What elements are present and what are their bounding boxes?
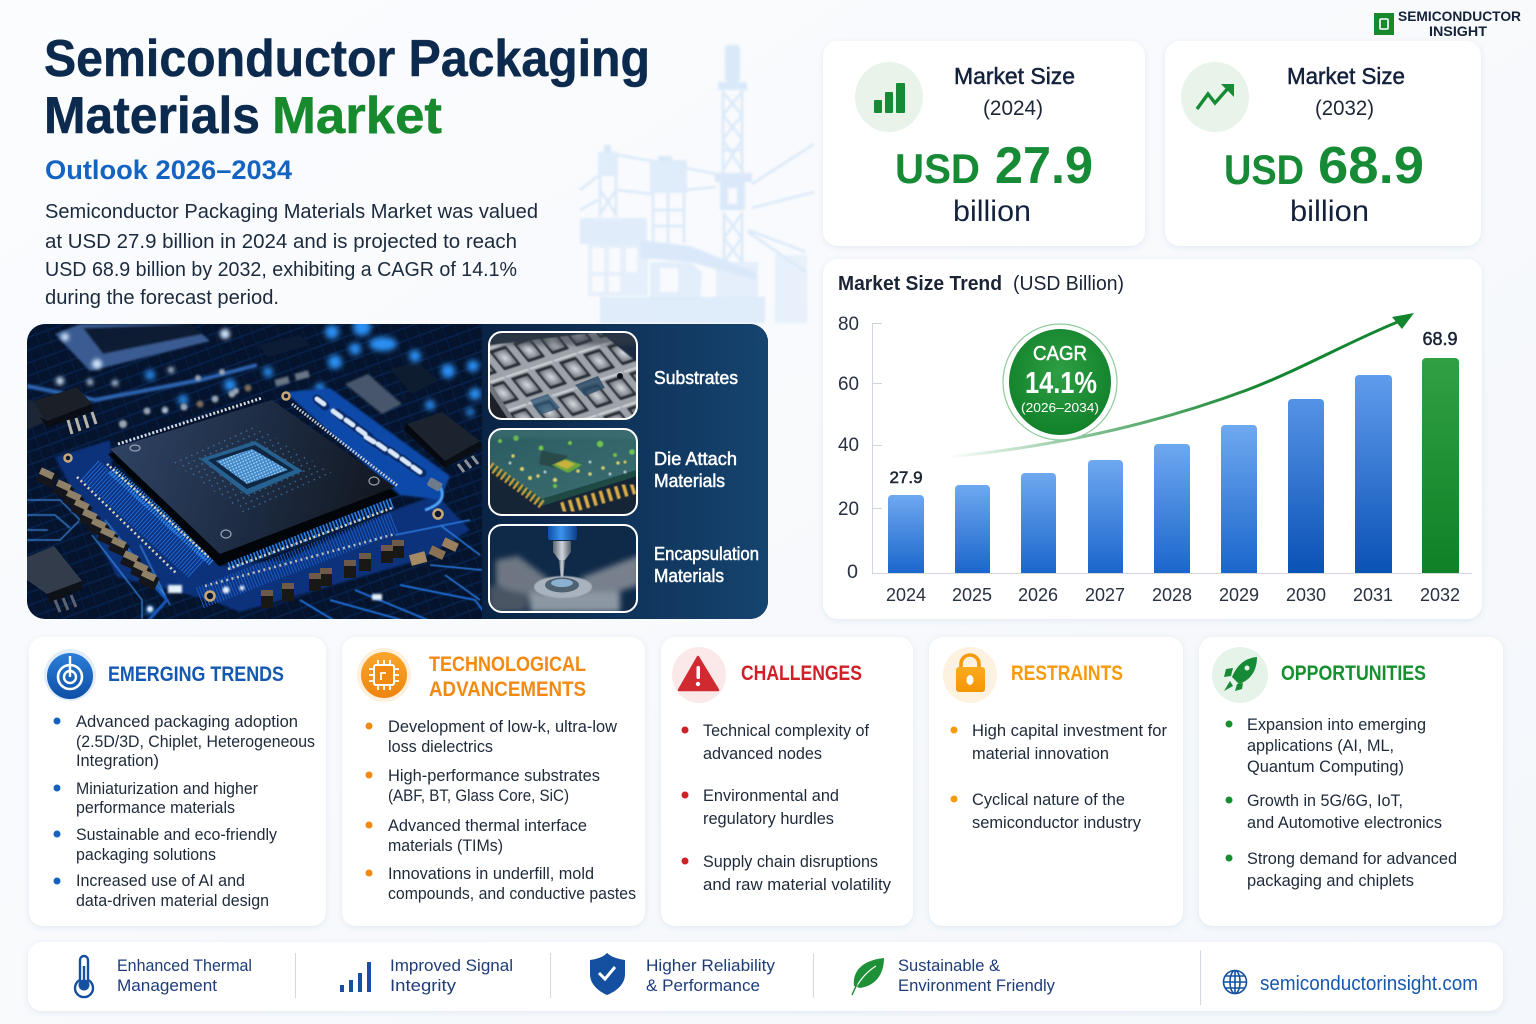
- opportunities bullet list: Growth in 5G/6G, IoT,: [1247, 792, 1403, 810]
- x axis labels: [886, 585, 1460, 605]
- SW fan-out: [77, 464, 213, 574]
- material labels: Die Attach: [654, 449, 737, 469]
- restraints bullet list: Cyclical nature of the: [972, 791, 1125, 809]
- technology bullet list: compounds, and conductive pastes: [388, 885, 636, 903]
- panel: market size 2032: USD: [1224, 146, 1304, 193]
- restraints bullet list: semiconductor industry: [972, 814, 1142, 832]
- chip body: [108, 452, 398, 566]
- technology bullet list: loss dielectrics: [388, 738, 493, 756]
- icon: bar chart: [855, 62, 923, 132]
- thumbnail: die attach materials: [489, 429, 637, 515]
- y axis labels: 60: [838, 374, 859, 395]
- chart title: Market Size Trend: [838, 273, 1002, 295]
- material labels: Materials: [654, 566, 724, 586]
- material labels: Substrates: [654, 368, 738, 388]
- chart title: (USD Billion): [1013, 273, 1124, 295]
- material labels: [654, 368, 759, 586]
- x axis labels: 2029: [1219, 585, 1259, 605]
- trend bullet list: packaging solutions: [76, 846, 216, 864]
- panel: challenges: CHALLENGES: [741, 662, 862, 685]
- challenges bullet list: Technical complexity of: [703, 722, 869, 740]
- bar value labels: [889, 329, 1458, 487]
- trend bullet list: Integration): [76, 752, 159, 770]
- icon: rising trend arrow: [1181, 62, 1249, 132]
- opportunities bullet list: and Automotive electronics: [1247, 814, 1442, 832]
- technology bullet list: [366, 718, 636, 903]
- technology heading: ADVANCEMENTS: [429, 678, 586, 701]
- bar value labels: 68.9: [1422, 329, 1458, 349]
- panel: emerging trends: [29, 637, 326, 926]
- CAGR badge: (2026–2034): [1021, 400, 1099, 415]
- y axis labels: [838, 314, 859, 583]
- logo: Semiconductor Insight: INSIGHT: [1429, 23, 1487, 39]
- blue glows: [145, 318, 481, 614]
- panel: market size 2024: [823, 41, 1145, 246]
- x axis labels: 2024: [886, 585, 926, 605]
- trend bullet list: [54, 713, 315, 910]
- y axis labels: 40: [838, 435, 859, 456]
- title: Market: [272, 87, 442, 145]
- opportunities bullet list: packaging and chiplets: [1247, 872, 1414, 890]
- technology bullet list: High-performance substrates: [388, 767, 600, 785]
- mounting holes: [64, 392, 442, 600]
- SE fan-out: [200, 502, 395, 598]
- y axis labels: 0: [847, 562, 858, 583]
- title: Materials: [44, 87, 260, 145]
- technology bullet list: materials (TIMs): [388, 837, 503, 855]
- icon: leaf: [852, 958, 884, 995]
- technology bullet list: Advanced thermal interface: [388, 817, 587, 835]
- restraints bullet list: [950, 722, 1167, 832]
- logo: Semiconductor Insight: SEMICONDUCTOR: [1398, 8, 1521, 24]
- CAGR badge: [1003, 324, 1117, 440]
- challenges bullet list: regulatory hurdles: [703, 810, 834, 828]
- right navy panel: [482, 324, 768, 619]
- chart title: [838, 273, 1124, 295]
- trend bullet list: Sustainable and eco-friendly: [76, 826, 278, 844]
- icon: globe: [1224, 970, 1246, 994]
- challenges bullet list: [682, 722, 892, 894]
- benefit: thermal management: Enhanced Thermal: [117, 956, 252, 975]
- opportunities bullet list: [1226, 716, 1457, 890]
- axes: [872, 324, 1472, 574]
- restraints bullet list: High capital investment for: [972, 722, 1167, 740]
- background: faint industrial tower illustration: [580, 45, 814, 323]
- restraints bullet list: material innovation: [972, 745, 1109, 763]
- lozenge silver components: [317, 399, 443, 492]
- panel: technological advancements: [342, 637, 645, 926]
- icon: padlock: [943, 647, 997, 703]
- opportunities bullet list: Strong demand for advanced: [1247, 850, 1457, 868]
- panel: restraints: RESTRAINTS: [1011, 662, 1123, 685]
- panel: circuit board photo with material types: [27, 318, 768, 630]
- benefit: reliability: Higher Reliability: [646, 956, 775, 975]
- x axis labels: 2026: [1018, 585, 1058, 605]
- out of focus background components: [27, 324, 438, 430]
- x axis labels: 2027: [1085, 585, 1125, 605]
- technology heading: [429, 653, 586, 701]
- CAGR badge: 14.1%: [1025, 365, 1097, 400]
- intro paragraph: [45, 200, 538, 309]
- brown lower left components: [36, 467, 160, 590]
- bar chart: [888, 358, 1459, 573]
- x axis labels: 2025: [952, 585, 992, 605]
- thumbnail: encapsulation materials: [489, 525, 640, 612]
- trend bullet list: Increased use of AI and: [76, 872, 245, 890]
- challenges bullet list: advanced nodes: [703, 745, 822, 763]
- panel: market size trend chart: [823, 259, 1482, 619]
- technology heading: TECHNOLOGICAL: [429, 653, 586, 676]
- intro paragraph: Semiconductor Packaging Materials Market was valued: [45, 200, 538, 223]
- trend bullet list: performance materials: [76, 799, 235, 817]
- x axis labels: 2028: [1152, 585, 1192, 605]
- panel: emerging trends: EMERGING TRENDS: [108, 663, 284, 686]
- title: Semiconductor Packaging: [44, 30, 650, 88]
- bar value labels: 27.9: [889, 468, 923, 487]
- icon: shield check: [590, 953, 625, 995]
- website: semiconductorinsight.com: [1260, 973, 1478, 995]
- trend bullet list: (2.5D/3D, Chiplet, Heterogeneous: [76, 733, 315, 751]
- ICs near chip: [27, 387, 482, 612]
- panel: restraints: [929, 637, 1183, 926]
- trend bullet list: Advanced packaging adoption: [76, 713, 298, 731]
- material labels: Materials: [654, 471, 725, 491]
- icon: thermometer: [75, 956, 93, 997]
- white glints on board: [147, 585, 382, 612]
- technology bullet list: Development of low-k, ultra-low: [388, 718, 617, 736]
- y axis labels: 20: [838, 499, 859, 520]
- benefit: sustainability: Sustainable &: [898, 956, 1001, 975]
- title: [44, 30, 650, 145]
- y axis labels: 80: [838, 314, 859, 335]
- thumbnail: substrates: [489, 332, 637, 419]
- subtitle: Outlook 2026–2034: [45, 155, 292, 185]
- trend bullet list: data-driven material design: [76, 892, 269, 910]
- benefit: reliability: & Performance: [646, 976, 760, 995]
- icon: warning triangle: [672, 647, 726, 703]
- panel: market size 2024: billion: [953, 195, 1031, 228]
- panel: market size 2024: (2024): [983, 97, 1043, 120]
- x axis labels: 2031: [1353, 585, 1393, 605]
- lit circuit board: [55, 440, 470, 612]
- panel: footer benefits strip: [28, 942, 1503, 1011]
- panel: market size 2024: USD: [895, 145, 980, 192]
- panel: market size 2032: Market Size: [1287, 63, 1405, 89]
- trend bullet list: Miniaturization and higher: [76, 780, 258, 798]
- panel: market size 2032: [1165, 41, 1481, 246]
- growth arrow: [948, 313, 1414, 457]
- intro paragraph: USD 68.9 billion by 2032, exhibiting a CAGR of 14.1%: [45, 258, 517, 281]
- benefit: sustainability: Environment Friendly: [898, 976, 1055, 995]
- panel: market size 2032: (2032): [1315, 97, 1374, 120]
- opportunities bullet list: Expansion into emerging: [1247, 716, 1426, 734]
- icon: rocket: [1212, 647, 1268, 703]
- opportunities bullet list: Quantum Computing): [1247, 758, 1404, 776]
- benefit: thermal management: Management: [117, 976, 217, 995]
- challenges bullet list: Supply chain disruptions: [703, 853, 878, 871]
- benefit: thermal management: [117, 956, 252, 995]
- glints: [56, 329, 230, 386]
- icon: signal bars: [340, 962, 371, 992]
- panel: opportunities: [1199, 637, 1503, 926]
- benefit: signal integrity: Improved Signal: [390, 956, 513, 975]
- benefit: reliability: [646, 956, 775, 995]
- benefit: sustainability: [898, 956, 1055, 995]
- x axis labels: 2030: [1286, 585, 1326, 605]
- bright traces: [27, 487, 490, 630]
- technology bullet list: Innovations in underfill, mold: [388, 865, 594, 883]
- x axis labels: 2032: [1420, 585, 1460, 605]
- brown lower right components: [261, 537, 459, 608]
- logo: Semiconductor Insight: [1374, 8, 1521, 39]
- panel: market size 2024: 27.9: [995, 137, 1093, 195]
- technology bullet list: (ABF, BT, Glass Core, SiC): [388, 787, 569, 805]
- panel: market size 2032: billion: [1290, 195, 1369, 228]
- intro paragraph: at USD 27.9 billion in 2024 and is projected to reach: [45, 230, 517, 253]
- challenges bullet list: and raw material volatility: [703, 876, 892, 894]
- opportunities bullet list: applications (AI, ML,: [1247, 737, 1394, 755]
- intro paragraph: during the forecast period.: [45, 286, 279, 309]
- icon: target: [44, 649, 96, 701]
- benefit: signal integrity: [390, 956, 513, 995]
- panel: opportunities: OPPORTUNITIES: [1281, 662, 1426, 685]
- benefit: signal integrity: Integrity: [390, 976, 457, 995]
- material labels: Encapsulation: [654, 544, 759, 564]
- challenges bullet list: Environmental and: [703, 787, 839, 805]
- icon: orange chip: [357, 648, 411, 702]
- row of small parts behind chip: [119, 369, 310, 428]
- panel: market size 2024: Market Size: [954, 63, 1075, 89]
- panel: market size 2032: 68.9: [1318, 137, 1424, 195]
- CAGR badge: CAGR: [1033, 343, 1087, 365]
- panel: challenges: [661, 637, 913, 926]
